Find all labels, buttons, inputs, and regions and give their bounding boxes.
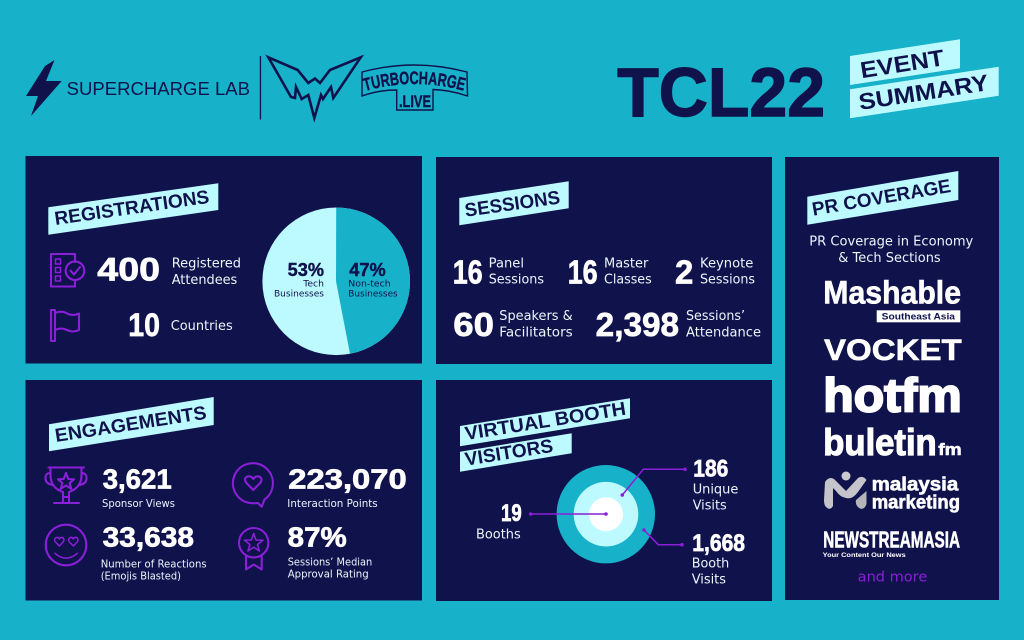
stat: 10 countries: 10 [128, 307, 160, 343]
logo: Turbocharge Live [361, 64, 468, 111]
connector: booths [529, 512, 608, 516]
logo: Vocket: VOCKET [824, 334, 962, 367]
stat: 186 unique visits: 186 [693, 456, 728, 483]
label: 53% tech businesses: 53% [288, 260, 324, 280]
heading: sessions: SESSIONS [463, 187, 561, 222]
header: partner logos [26, 54, 468, 123]
logo: Turbocharge Live: .LIVE [399, 92, 431, 111]
heading: virtual booth visitors: VIRTUAL BOOTH [463, 399, 627, 445]
heading: registrations: REGISTRATIONS [53, 187, 211, 230]
stat: 186 unique visits [693, 456, 738, 513]
label: 53% tech businesses: Tech [302, 280, 324, 290]
title ribbon: Event Summary [850, 39, 999, 118]
heading: virtual booth visitors: VISITORS [463, 436, 555, 471]
heading: PR coverage: PR COVERAGE [811, 176, 953, 221]
stat: 19 booths: Booths [476, 527, 521, 542]
stat: 16 master classes: Master [604, 256, 649, 271]
label: 47% non-tech businesses: Businesses [348, 290, 398, 300]
stat: 1,668 booth visits [692, 530, 745, 587]
stat: 33,638 reactions [101, 522, 207, 582]
stat: 16 panel sessions: Panel [489, 256, 524, 271]
stat: 87% approval rating: 87% [288, 522, 347, 553]
label: 53% tech businesses [274, 260, 325, 300]
stat: 19 booths: 19 [501, 500, 522, 527]
panel: registrations [26, 156, 422, 364]
stat: 3,621 sponsor views [102, 463, 175, 510]
pie chart: business split [262, 207, 410, 355]
panel: virtual booth visitors [436, 380, 772, 601]
stat: 223,070 interaction points: 223,070 [288, 463, 407, 494]
stat: 33,638 reactions: 33,638 [103, 522, 194, 553]
stat: 2,398 sessions attendance: 2,398 [596, 306, 679, 343]
stat: 2,398 sessions attendance: Attendance [686, 326, 761, 341]
stat: 2 keynote sessions [675, 253, 755, 290]
stat: 3,621 sponsor views: 3,621 [103, 463, 172, 494]
stat: 19 booths [476, 500, 522, 542]
logo: Newstream Asia [823, 526, 960, 559]
stat: 87% approval rating: Sessions’ Median [288, 557, 372, 569]
logo text: Supercharge Lab: SUPERCHARGE LAB [67, 78, 250, 99]
stat: 400 registered attendees: Registered [172, 256, 241, 271]
icon: heart speech bubble [233, 463, 273, 507]
logo divider [260, 56, 261, 120]
stat: 10 countries: Countries [171, 319, 233, 334]
logo: malaysia marketing [824, 472, 960, 513]
icon: heart-eyes smiley [46, 525, 86, 565]
label: 47% non-tech businesses: Non-tech [348, 280, 391, 290]
icon: malaysia marketing mark [824, 472, 866, 509]
icon: trophy [45, 468, 87, 503]
stat: 16 panel sessions [453, 253, 544, 290]
stat: 2 keynote sessions: 2 [675, 253, 693, 290]
stat: 16 panel sessions: 16 [453, 253, 483, 290]
stat: 2 keynote sessions: Keynote [700, 256, 753, 271]
logo: buletin fm: fm [938, 440, 962, 459]
stat: 1,668 booth visits: 1,668 [692, 530, 745, 557]
logo: hotfm: hotfm [823, 369, 962, 422]
stat: 33,638 reactions: (Emojis Blasted) [101, 570, 181, 582]
stat: 400 registered attendees: 400 [97, 252, 160, 288]
icon: flag [51, 310, 79, 341]
stat: 186 unique visits: Unique [693, 482, 738, 497]
stat: 1,668 booth visits: Booth [692, 557, 729, 572]
stat: 16 master classes: Classes [604, 272, 652, 287]
label: 47% non-tech businesses [348, 260, 398, 300]
stat: 3,621 sponsor views: Sponsor Views [102, 498, 175, 510]
stat: 87% approval rating [288, 522, 372, 581]
text: PR coverage description [809, 235, 974, 266]
title: TCL22: TCL22 [617, 54, 825, 131]
connector: booth visits [642, 528, 684, 546]
icon: award ribbon [239, 528, 268, 570]
logo: Turbocharge Live: TURBOCHARGE [362, 71, 466, 91]
text: and more: and more [858, 570, 927, 586]
stat: 2,398 sessions attendance: Sessions’ [686, 309, 745, 324]
icon: winged W logo [268, 57, 361, 118]
stat: 2,398 sessions attendance [596, 306, 761, 343]
text: PR coverage description: & Tech Sections [838, 251, 941, 266]
stat: 60 speakers and facilitators: Speakers & [499, 309, 573, 324]
logo: Mashable Southeast Asia: Mashable [823, 274, 961, 310]
logo: malaysia marketing: malaysia [872, 475, 959, 496]
label: 53% tech businesses: Businesses [274, 290, 325, 300]
heading: virtual booth visitors [460, 398, 630, 472]
logo: malaysia marketing: marketing [872, 492, 960, 513]
stat: 400 registered attendees: Attendees [172, 273, 238, 288]
stat: 60 speakers and facilitators: 60 [453, 306, 494, 343]
stat: 16 panel sessions: Sessions [489, 272, 544, 287]
panel: engagements [26, 380, 422, 600]
stat: 223,070 interaction points [287, 463, 407, 510]
stat: 87% approval rating: Approval Rating [288, 569, 369, 581]
stat: 1,668 booth visits: Visits [692, 572, 726, 587]
panel: PR coverage [785, 157, 999, 600]
stat: 186 unique visits: Visits [693, 498, 727, 513]
stat: 60 speakers and facilitators [453, 306, 573, 343]
stat: 16 master classes: 16 [568, 253, 598, 290]
chart: concentric circles [557, 465, 655, 563]
text: PR coverage description: PR Coverage in Economy [809, 235, 974, 250]
panel: sessions [436, 157, 772, 364]
stat: 33,638 reactions: Number of Reactions [101, 559, 207, 571]
label: 47% non-tech businesses: 47% [349, 260, 386, 280]
title ribbon: Event Summary: SUMMARY [857, 69, 990, 115]
stat: 400 registered attendees [97, 252, 241, 288]
title ribbon: Event Summary: EVENT [858, 44, 946, 83]
logo: Newstream Asia: NEWSTREAMASIA [823, 526, 960, 552]
heading: engagements: ENGAGEMENTS [54, 403, 208, 447]
stat: 10 countries [128, 307, 233, 343]
icon: checklist [51, 254, 84, 286]
logo: buletin fm: buletin [823, 422, 937, 463]
stat: 2 keynote sessions: Sessions [700, 272, 755, 287]
stat: 60 speakers and facilitators: Facilitators [499, 326, 573, 341]
logo: Newstream Asia: Your Content Our News [823, 552, 906, 559]
logo: Mashable Southeast Asia: Southeast Asia [882, 312, 956, 322]
connector: unique visits [620, 468, 687, 497]
icon: supercharge lightning bolt [26, 60, 62, 116]
stat: 16 master classes [568, 253, 652, 290]
stat: 223,070 interaction points: Interaction Points [287, 498, 378, 510]
